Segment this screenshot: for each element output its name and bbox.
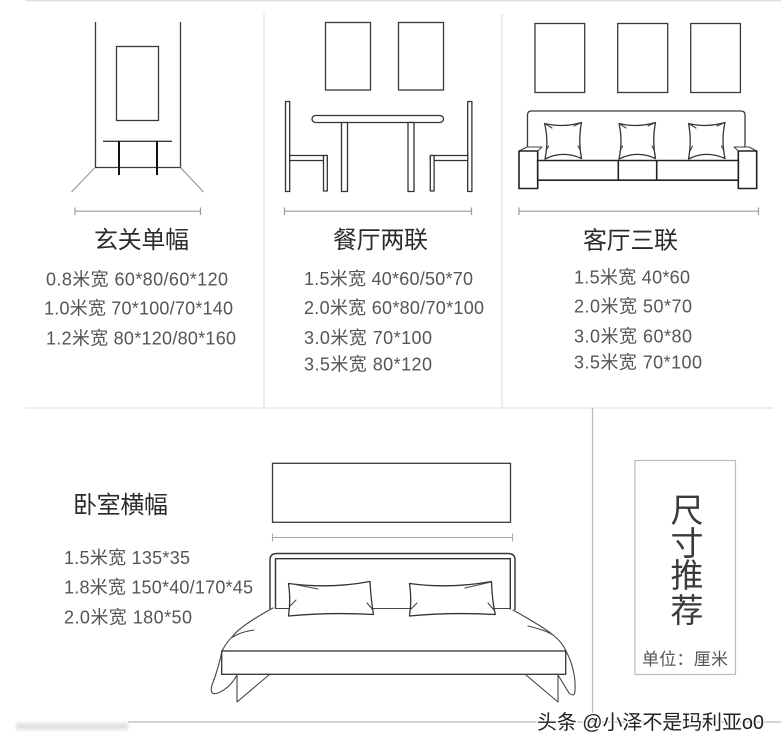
pillow centre (619, 122, 656, 159)
bed legs (237, 674, 558, 702)
vertical title: 寸 (670, 525, 704, 562)
panel: entryway single frame (44, 22, 236, 348)
size list: 1.2米宽 80*120/80*160 (46, 328, 236, 348)
illustration: bed with horizontal frame (211, 463, 575, 702)
size list: 1.5米宽 40*60/50*70 (304, 269, 473, 289)
pillow left (544, 122, 582, 159)
callout: size recommendation box (635, 460, 736, 674)
pillow right (410, 582, 495, 616)
size list: 3.0米宽 60*80 (574, 326, 692, 346)
pillow left (288, 582, 374, 616)
heading: 餐厅两联 (333, 227, 428, 254)
dimension line (519, 208, 758, 215)
heading: 客厅三联 (583, 228, 678, 254)
size list: 1.8米宽 150*40/170*45 (64, 578, 253, 598)
dimension line (284, 208, 472, 215)
size list: 1.0米宽 70*100/70*140 (44, 298, 233, 318)
heading: 玄关单幅 (94, 227, 189, 254)
size list (44, 270, 236, 348)
panel: living room triptych (519, 24, 758, 372)
size list: 1.5米宽 40*60 (574, 268, 690, 288)
size list: 0.8米宽 60*80/60*120 (46, 270, 228, 290)
watermark: blurred left (16, 723, 128, 730)
mattress (222, 651, 566, 674)
size list: 2.0米宽 180*50 (64, 608, 192, 628)
watermark: author: 头条 @小泽不是玛利亚o0 (537, 711, 764, 734)
vertical title: 推 (670, 557, 704, 594)
size list: 2.0米宽 50*70 (574, 296, 692, 316)
size list: 3.5米宽 80*120 (304, 354, 432, 374)
vertical title: 尺 (670, 492, 704, 529)
panel: bedroom horizontal frame (64, 463, 575, 702)
illustration: sofa with three frames (519, 24, 757, 188)
size list: 1.5米宽 135*35 (64, 548, 190, 568)
heading: 卧室横幅 (73, 492, 168, 519)
size list: 3.0米宽 70*100 (304, 328, 432, 348)
panel: dining room diptych (284, 22, 484, 374)
bedspread (222, 608, 566, 651)
pillow right (688, 122, 725, 159)
illustration: dining table with two frames (286, 22, 472, 192)
illustration: entryway (72, 22, 204, 192)
vertical title: 荐 (670, 592, 704, 629)
size list (64, 548, 253, 628)
size list (304, 269, 484, 374)
unit note: 单位：厘米 (642, 650, 728, 669)
size list: 2.0米宽 60*80/70*100 (304, 298, 484, 318)
vertical title (670, 492, 704, 629)
dimension line (75, 208, 200, 215)
size list (574, 268, 702, 372)
size list: 3.5米宽 70*100 (574, 352, 702, 372)
